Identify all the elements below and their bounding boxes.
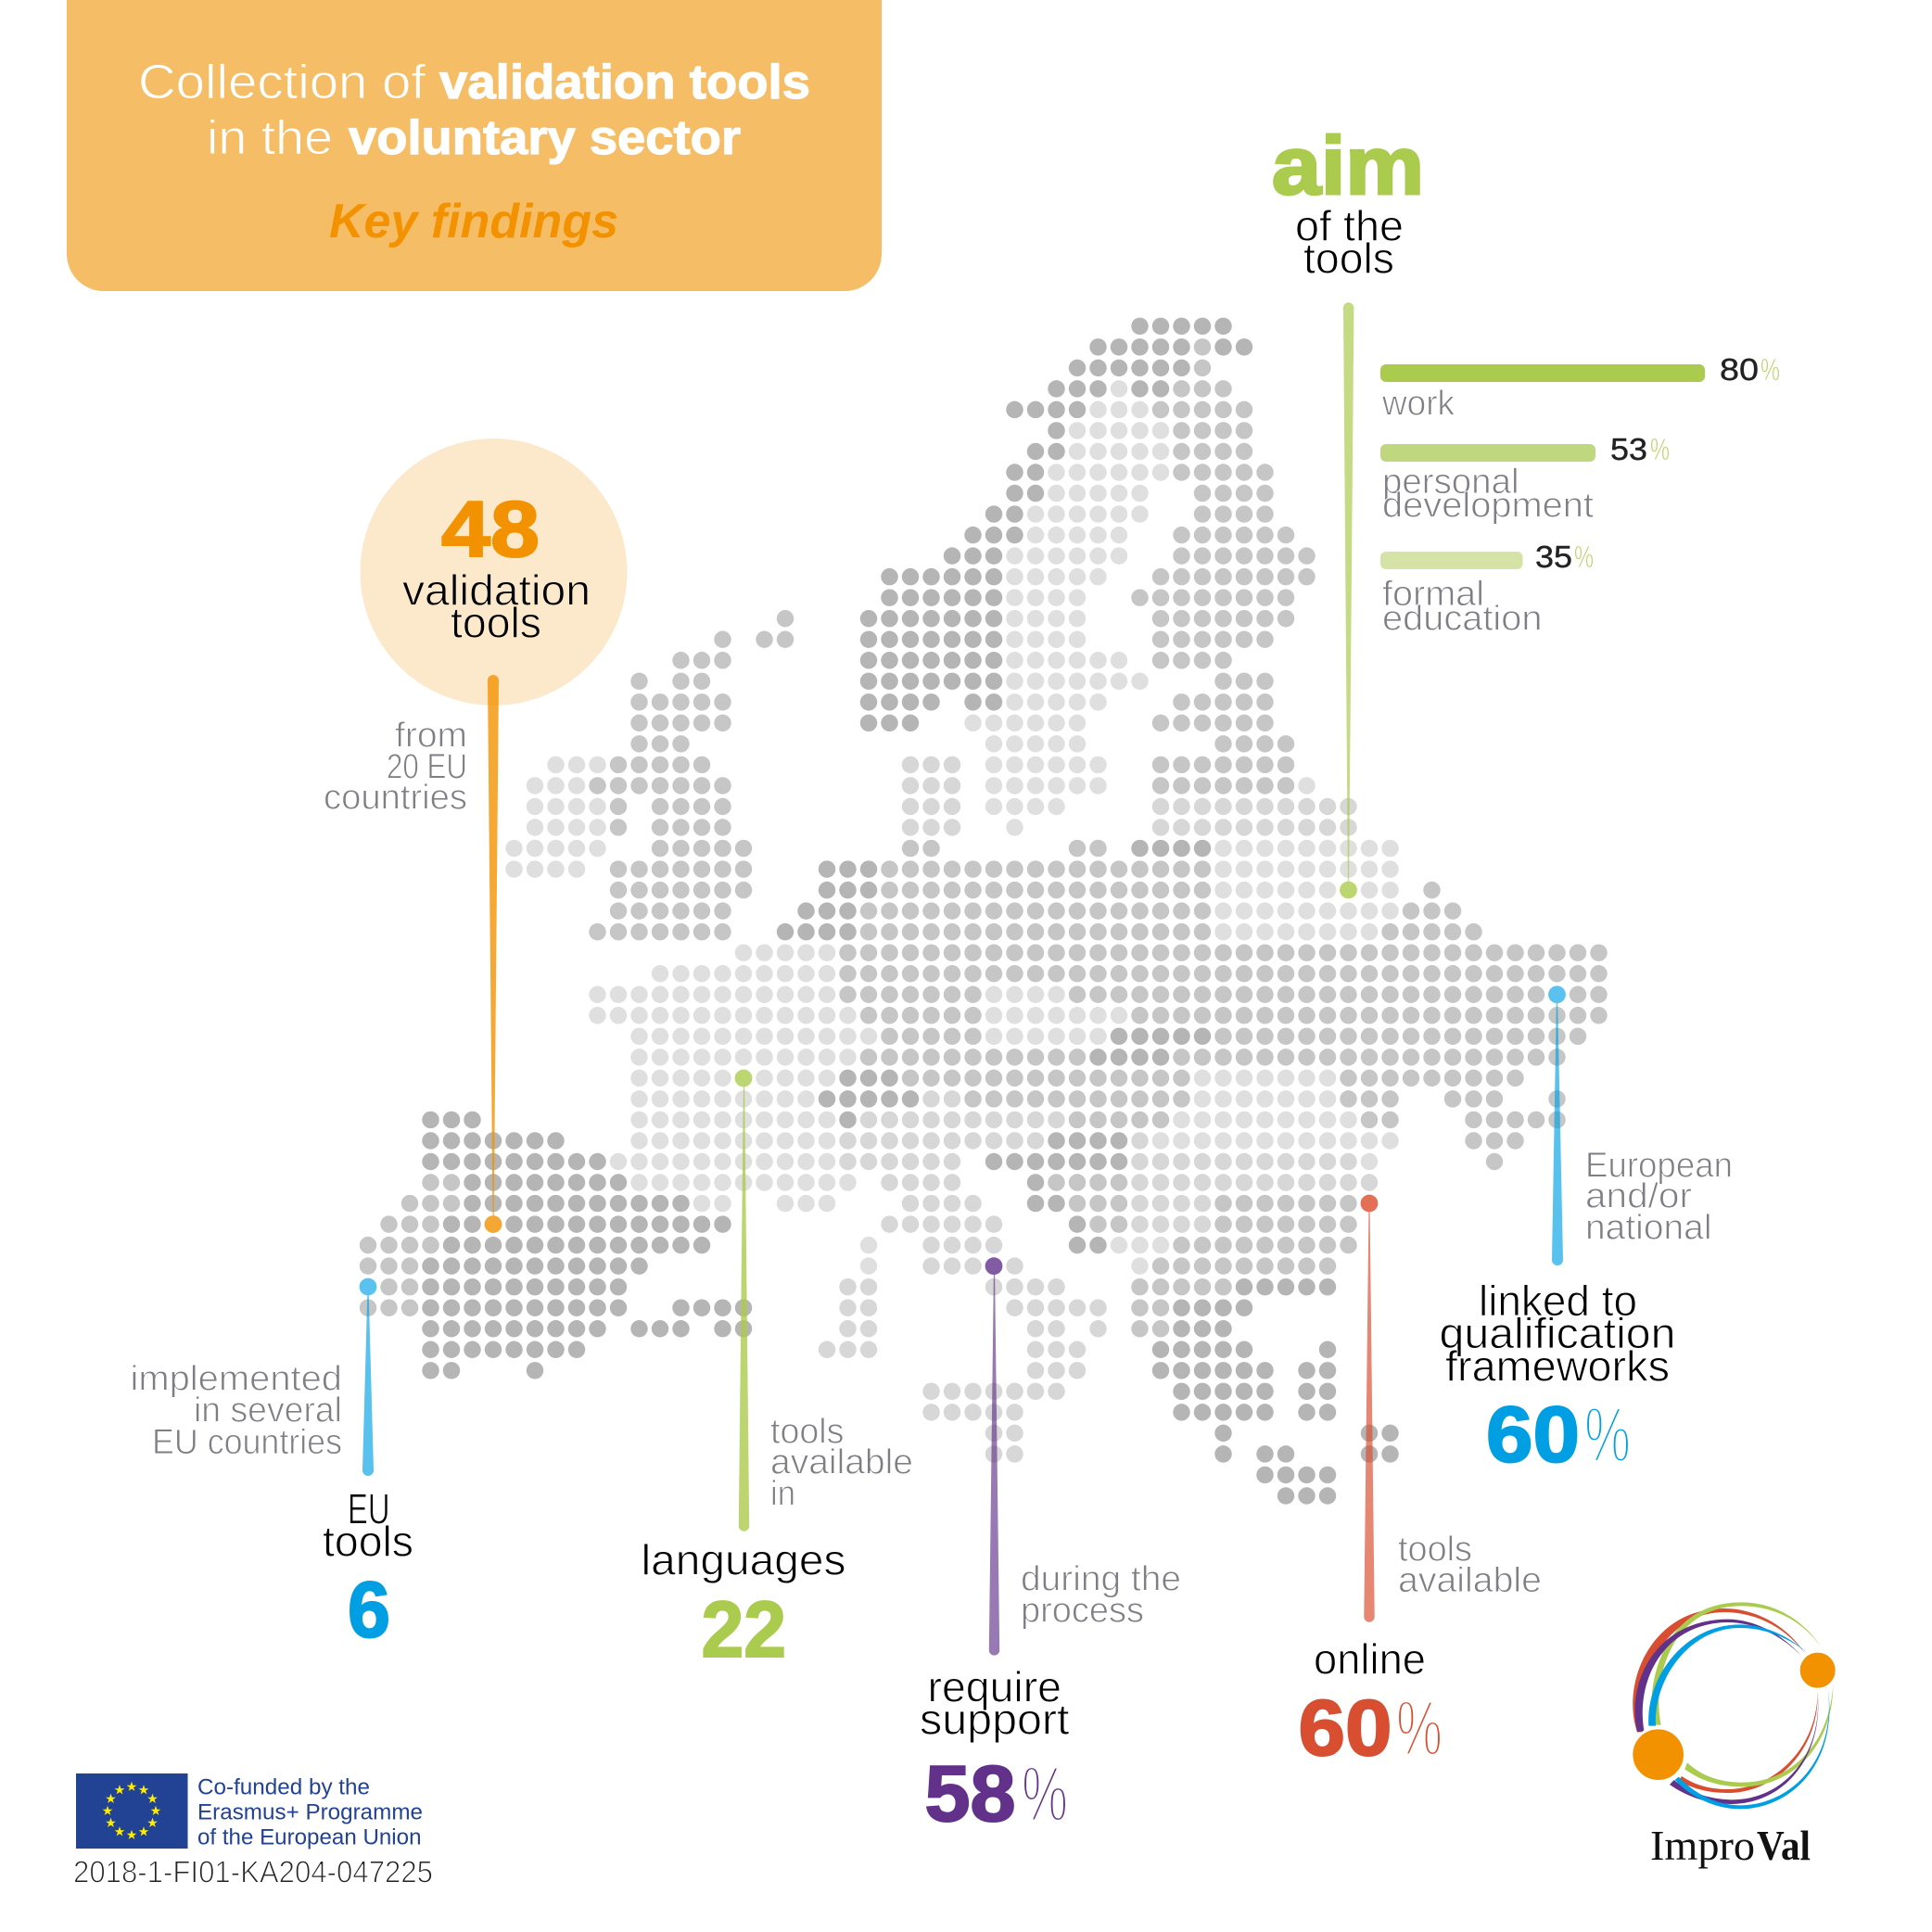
logo wordmark [1650, 1822, 1811, 1869]
note: European and/or national: national [1585, 1209, 1711, 1248]
title line 2: voluntary sector [349, 111, 741, 165]
subtitle: key findings: Key findings [329, 195, 618, 248]
stat: linked to qualification frameworks 60%: frameworks [1445, 1342, 1670, 1391]
stat: EU tools 6: 6 [348, 1567, 390, 1654]
stat: linked to qualification frameworks 60%: % [1584, 1391, 1631, 1478]
orange pointer [485, 675, 502, 1233]
stat: online 60%: 60 [1298, 1684, 1392, 1773]
project number: 2018-1-FI01-KA204-047225 [73, 1854, 433, 1889]
bar: formal education 35%: education [1382, 599, 1543, 638]
logo wordmark: Val [1757, 1822, 1811, 1869]
title line 2: in the [207, 111, 333, 165]
note: tools available: available [1398, 1561, 1542, 1600]
note: from 20 EU countries [324, 716, 467, 818]
stat: online 60% [1298, 1635, 1443, 1773]
note: tools available in: in [770, 1474, 795, 1513]
note: implemented in several EU countries: implemented [130, 1359, 342, 1398]
stat: require support 58%: require [927, 1663, 1061, 1711]
stat: linked to qualification frameworks 60%: qualification [1439, 1309, 1676, 1357]
red pointer: online [1361, 1195, 1378, 1622]
aim of the tools heading: tools [1303, 234, 1394, 282]
48 validation tools circle [360, 439, 627, 705]
validation tools label [402, 566, 591, 647]
blue pointer: EU tools [360, 1278, 376, 1476]
title line 1: Collection of [138, 56, 426, 109]
stat: require support 58%: support [920, 1695, 1070, 1743]
bar: work 80%: 80 [1720, 352, 1759, 387]
note: during the process: process [1021, 1591, 1144, 1630]
stat: EU tools 6: EU [348, 1485, 389, 1533]
Erasmus+ co-funding statement: of the European Union [197, 1824, 421, 1850]
EU flag [76, 1773, 187, 1849]
logo rings [1632, 1602, 1837, 1809]
aim bar chart [1380, 352, 1780, 638]
note: European and/or national [1585, 1146, 1733, 1248]
bar: personal development 53%: development [1382, 486, 1594, 525]
stat: languages 22: 22 [701, 1586, 786, 1674]
green aim pointer [1340, 302, 1357, 898]
note: from 20 EU countries: countries [324, 779, 467, 818]
note: during the process: during the [1021, 1559, 1181, 1598]
note: European and/or national: European [1585, 1146, 1733, 1185]
aim of the tools heading [1272, 120, 1424, 282]
bar: formal education 35%: % [1574, 540, 1594, 574]
stat: linked to qualification frameworks 60% [1439, 1277, 1676, 1480]
bar: formal education 35%: 35 [1535, 540, 1572, 574]
validation tools label: tools [451, 599, 541, 647]
stat: EU tools 6: tools [323, 1517, 413, 1565]
note: implemented in several EU countries: EU countries [152, 1423, 342, 1462]
note: European and/or national: and/or [1585, 1177, 1692, 1216]
bar: personal development 53%: personal [1382, 463, 1519, 502]
stat: online 60%: % [1396, 1684, 1443, 1772]
note: implemented in several EU countries [130, 1359, 342, 1462]
purple pointer: require support [985, 1257, 1002, 1656]
stat: EU tools 6 [323, 1485, 413, 1654]
note: from 20 EU countries: from [395, 716, 467, 755]
note: tools available in: available [770, 1443, 913, 1481]
stat: linked to qualification frameworks 60%: linked to [1479, 1277, 1637, 1325]
logo wordmark: Impro [1650, 1822, 1755, 1869]
ImproVal logo [1632, 1602, 1837, 1869]
validation tools label: validation [402, 566, 591, 614]
stat: require support 58%: 58 [925, 1750, 1016, 1838]
stat: languages 22 [642, 1535, 845, 1674]
dot map of Europe [368, 326, 1601, 1495]
blue pointer: qualification frameworks [1548, 985, 1566, 1265]
bar: work 80%: % [1760, 352, 1780, 387]
note: tools available in [770, 1413, 913, 1513]
title panel [67, 0, 882, 291]
stat: require support 58% [920, 1663, 1070, 1838]
stat: languages 22: languages [642, 1535, 845, 1583]
aim of the tools heading: aim [1272, 120, 1424, 211]
bar: formal education 35%: formal [1382, 575, 1484, 614]
bar: personal development 53%: 53 [1610, 432, 1647, 466]
Erasmus+ co-funding statement: Erasmus+ Programme [197, 1800, 423, 1824]
Erasmus+ co-funding statement: Co-funded by the [197, 1774, 370, 1800]
number 48: 48 [441, 486, 540, 574]
note: tools available: tools [1398, 1530, 1472, 1569]
bar: work 80%: work [1381, 384, 1455, 423]
stat: linked to qualification frameworks 60%: 60 [1486, 1391, 1580, 1480]
title line 1 [138, 56, 810, 109]
note: implemented in several EU countries: in several [194, 1391, 342, 1430]
Erasmus+ co-funding statement [197, 1774, 423, 1850]
green pointer: languages [735, 1070, 752, 1532]
stat: require support 58%: % [1022, 1750, 1068, 1837]
title line 1: validation tools [439, 56, 810, 109]
bar: personal development 53% [1380, 432, 1670, 525]
bar: personal development 53%: % [1650, 432, 1670, 466]
stat: online 60%: online [1314, 1635, 1426, 1684]
bar: formal education 35% [1380, 540, 1594, 638]
note: tools available in: tools [770, 1413, 844, 1452]
note: tools available [1398, 1530, 1542, 1600]
bar: work 80% [1380, 352, 1780, 423]
note: from 20 EU countries: 20 EU [387, 747, 467, 786]
note: during the process [1021, 1559, 1181, 1630]
aim of the tools heading: of the [1295, 202, 1404, 250]
